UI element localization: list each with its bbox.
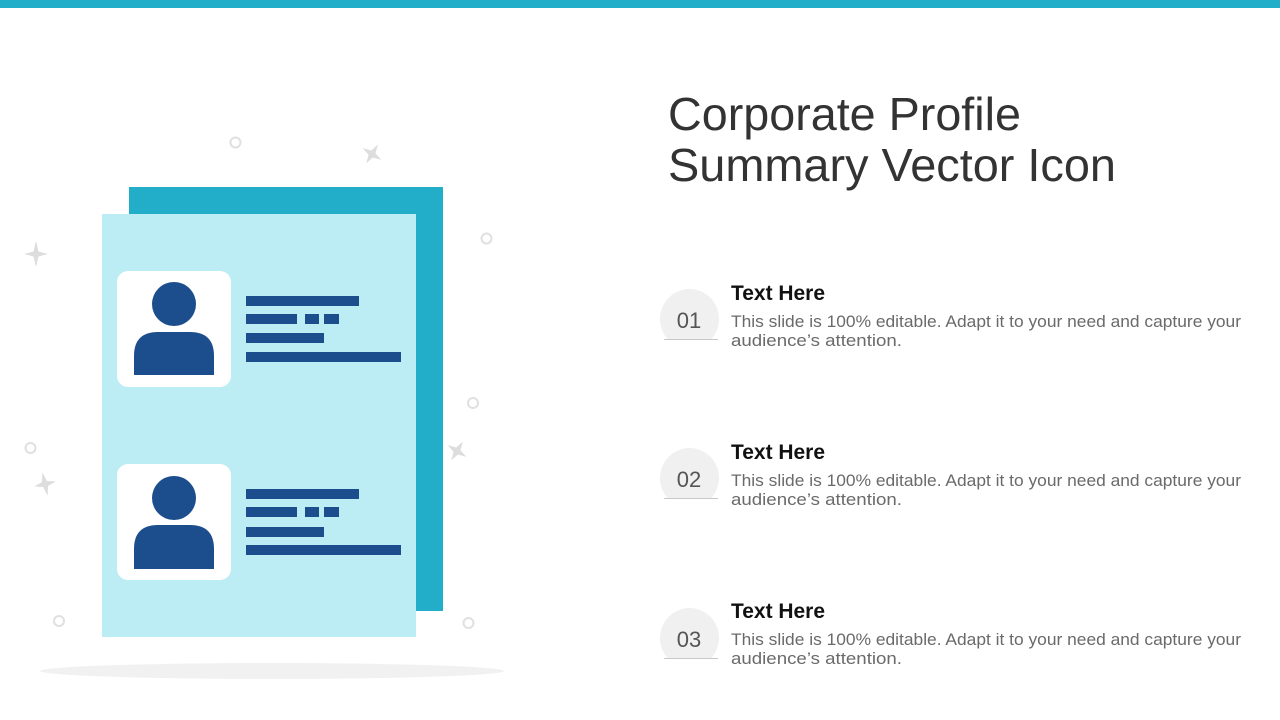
description 01: audience’s attention. [731,331,902,350]
description 03 [731,630,1241,668]
description 03: audience’s attention. [731,649,902,668]
avatar card 2 [117,464,231,580]
title: Corporate Profile [668,88,1021,140]
description 01 [731,312,1241,350]
heading 01: Text Here [731,282,825,305]
top accent bar [0,0,1280,8]
number badge 01: 01 [677,308,701,333]
text lines 2 [246,489,401,555]
list item 02 [660,441,1241,509]
decorative circles and sparkles [24,138,492,628]
title [668,88,1116,191]
description 02: This slide is 100% editable. Adapt it to your need and capture your [731,471,1241,490]
number badge 01 [660,289,719,340]
number badge 02 [660,448,719,498]
ground shadow [40,663,504,679]
description 01: This slide is 100% editable. Adapt it to your need and capture your [731,312,1241,331]
avatar card 1 [117,271,231,387]
profile entry 2 [117,464,401,580]
panel: document illustration [24,138,504,679]
heading 03: Text Here [731,600,825,623]
number badge 03: 03 [677,627,701,652]
profile entry 1 [117,271,401,387]
text lines 1 [246,296,401,362]
description 02: audience’s attention. [731,490,902,509]
heading 02: Text Here [731,441,825,464]
icon: person 1 [134,282,214,375]
list item 01 [660,282,1241,350]
list item 03 [660,600,1241,668]
back page [129,187,443,611]
icon: person 2 [134,476,214,569]
number badge 03 [660,608,719,658]
description 03: This slide is 100% editable. Adapt it to your need and capture your [731,630,1241,649]
title: Summary Vector Icon [668,139,1116,191]
number badge 02: 02 [677,467,701,492]
description 02 [731,471,1241,509]
front page [102,214,416,637]
